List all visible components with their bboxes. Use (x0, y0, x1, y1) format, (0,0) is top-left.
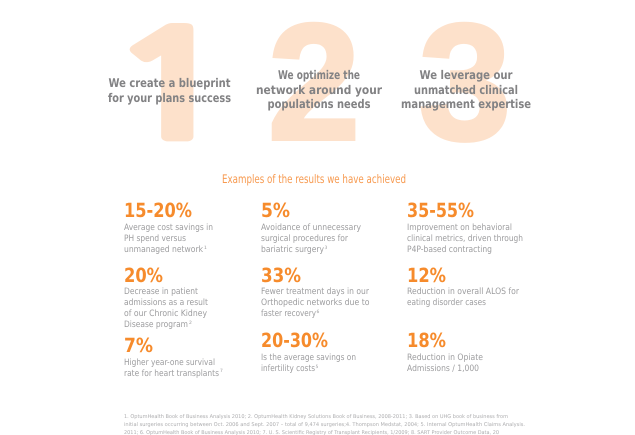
step 3 text: management expertise (401, 97, 531, 111)
stat: 20% (124, 264, 208, 330)
stat: 20%: admissions as a result (124, 298, 208, 308)
step 2 text: network around your (256, 83, 382, 97)
stat: 33% (261, 264, 370, 319)
big numeral 1: 1 (106, 15, 239, 161)
stat: 5%: bariatric surgery (261, 245, 324, 255)
stat: 20-30%: Is the average savings on (261, 353, 356, 363)
panel: step 1 (106, 15, 239, 161)
stat: 20-30%: 20-30% (261, 329, 328, 352)
footnotes (124, 414, 525, 435)
stat: 5%: surgical procedures for (261, 234, 348, 244)
stat: 7%: 7% (124, 334, 153, 357)
stat: 20%: Disease program (124, 320, 188, 330)
stat: 5%: 5% (261, 199, 290, 222)
stat: 33%: 33% (261, 264, 301, 287)
stat: 20%: Decrease in patient (124, 287, 198, 297)
stat: 15-20% (124, 199, 213, 255)
stat: 33%: Fewer treatment days in our (261, 287, 369, 297)
step 1 text: We create a blueprint (108, 76, 231, 90)
stat: 15-20%: Average cost savings in (124, 223, 213, 233)
stat: 7% (124, 334, 223, 379)
stat: 12%: 12% (407, 264, 446, 287)
stat: 35-55% (407, 199, 523, 255)
stat: 20-30% (261, 329, 356, 374)
stat: 5% (261, 199, 361, 255)
stat: 18%: 18% (407, 329, 446, 352)
stat: 7%: Higher year-one survival (124, 358, 215, 368)
step 3 text: We leverage our (420, 68, 513, 82)
step 1 text (108, 76, 231, 105)
footnotes: 1. OptumHealth Book of Business Analysis 2010; 2. OptumHealth Kidney Solutions Book of Business, 2008-2011; 3. Based on UHG book of business from (124, 414, 508, 420)
stat: 15-20%: PH spend versus (124, 234, 186, 244)
stat: 15-20%: 1 (204, 245, 207, 251)
step 3 text: unmatched clinical (414, 83, 518, 97)
stat: 12%: eating disorder cases (407, 298, 486, 308)
heading: examples: Examples of the results we have achieved (222, 172, 406, 186)
footnotes: initial surgeries occurring between Oct. 2006 and Sept. 2007 – total of 9,474 surgeries;4. Thompson Medstat, 2004; 5. Internal OptumHealth Claims Analysis. (124, 422, 525, 428)
stat: 20%: 2 (189, 320, 192, 326)
stat: 20-30%: infertility costs (261, 364, 315, 374)
stat: 35-55%: clinical metrics, driven through (407, 234, 523, 244)
stat: 12%: Reduction in overall ALOS for (407, 287, 519, 297)
stat: 33%: faster recovery (261, 309, 316, 319)
stat: 5%: Avoidance of unnecessary (261, 223, 361, 233)
stat: 18%: Admissions / 1,000 (407, 364, 479, 374)
stat: 20%: of our Chronic Kidney (124, 309, 207, 319)
stat: 7%: 7 (220, 368, 223, 374)
stat: 5%: 3 (324, 245, 328, 251)
step 2 text: We optimize the (278, 68, 360, 82)
stat: 35-55%: 35-55% (407, 199, 474, 222)
panel: step 2 (256, 0, 382, 174)
stat: 15-20%: unmanaged network (124, 245, 204, 255)
stat: 18%: Reduction in Opiate (407, 353, 483, 363)
stat: 20-30%: 5 (316, 364, 318, 370)
stat: 35-55%: P4P-based contracting (407, 245, 492, 255)
stat: 35-55%: Improvement on behavioral (407, 223, 512, 233)
step 2 text: populations needs (268, 97, 370, 111)
stat: 33%: Orthopedic networks due to (261, 298, 370, 308)
step 3 text (401, 68, 531, 111)
stat: 20%: 20% (124, 264, 163, 287)
stat: 33%: 6 (316, 309, 320, 315)
stat: 12% (407, 264, 519, 308)
stat: 18% (407, 329, 483, 374)
step 1 text: for your plans success (108, 91, 231, 105)
stat: 7%: rate for heart transplants (124, 369, 219, 379)
stat: 15-20%: 15-20% (124, 199, 192, 222)
step 2 text (256, 68, 382, 111)
panel: step 3 (401, 0, 531, 174)
